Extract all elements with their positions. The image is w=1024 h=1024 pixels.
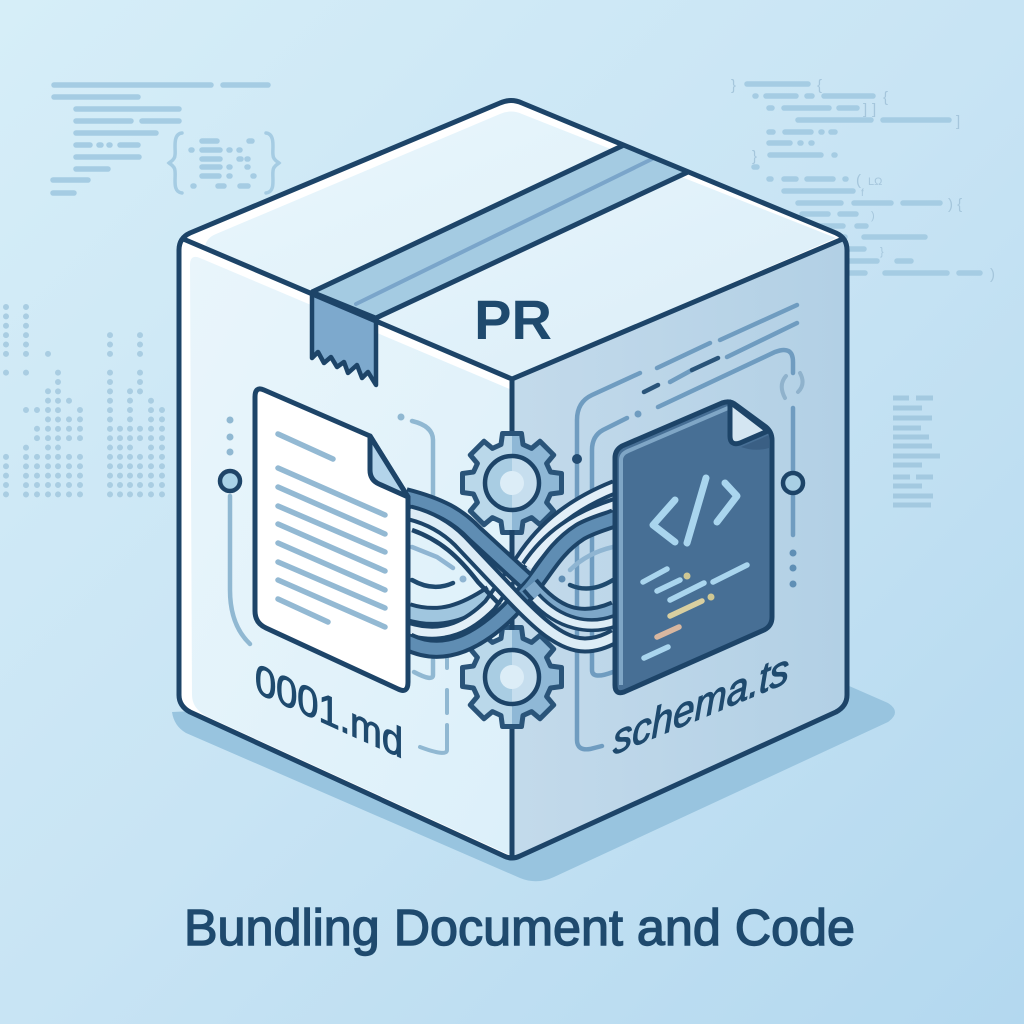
document folded corner [370,436,408,497]
background text block right [893,398,940,505]
background code glyphs: ) { [948,196,962,213]
code file schema.ts [615,402,772,693]
background code glyphs: ( [856,172,861,189]
background code glyphs: } [731,77,736,94]
background code glyphs: { [817,77,822,94]
background code glyphs: ] [872,101,876,118]
PR label: PR [474,288,552,351]
gear top [462,434,562,532]
background code glyphs: f [861,188,864,199]
background code lines top-left [53,85,279,193]
right face circuit decorations [572,305,803,749]
background code glyphs: LΩ [868,176,882,188]
left face circuit decorations [220,414,447,753]
tape highlight line [356,159,652,304]
code file fold [730,402,768,444]
ribbons intertwining document and code [405,487,615,649]
box top face [184,100,842,379]
code brackets icon [653,478,737,543]
code lines [643,565,747,658]
tape on top [312,145,688,318]
background code glyphs: ] [863,101,867,118]
label schema.ts: schema.ts [613,644,789,765]
title: Bundling Document and Code [184,899,855,956]
background dot matrix chart [6,307,162,495]
box right face [512,240,846,859]
background code glyphs: ) [871,210,875,222]
code file fold shadow [741,435,769,450]
background code glyphs: { [883,89,888,106]
gear bottom [462,628,562,726]
center axle between gears [510,530,514,630]
label 0001.md: 0001.md [255,655,403,768]
background code glyphs: ] [956,113,960,130]
background code glyphs: } [752,148,757,165]
background code glyphs [731,77,995,283]
box [179,100,847,859]
tape flap [312,292,376,385]
box left face [179,240,512,859]
document text lines [278,434,385,627]
background code glyphs: } [880,246,884,258]
code file sheet [615,402,772,693]
background code lines top-right [747,84,980,273]
background code glyphs: ) [990,266,995,283]
box drop shadow [172,682,895,881]
document file 0001.md [255,389,408,690]
document sheet [255,389,408,690]
code file edge highlight [621,408,728,685]
box outlines [179,100,847,858]
